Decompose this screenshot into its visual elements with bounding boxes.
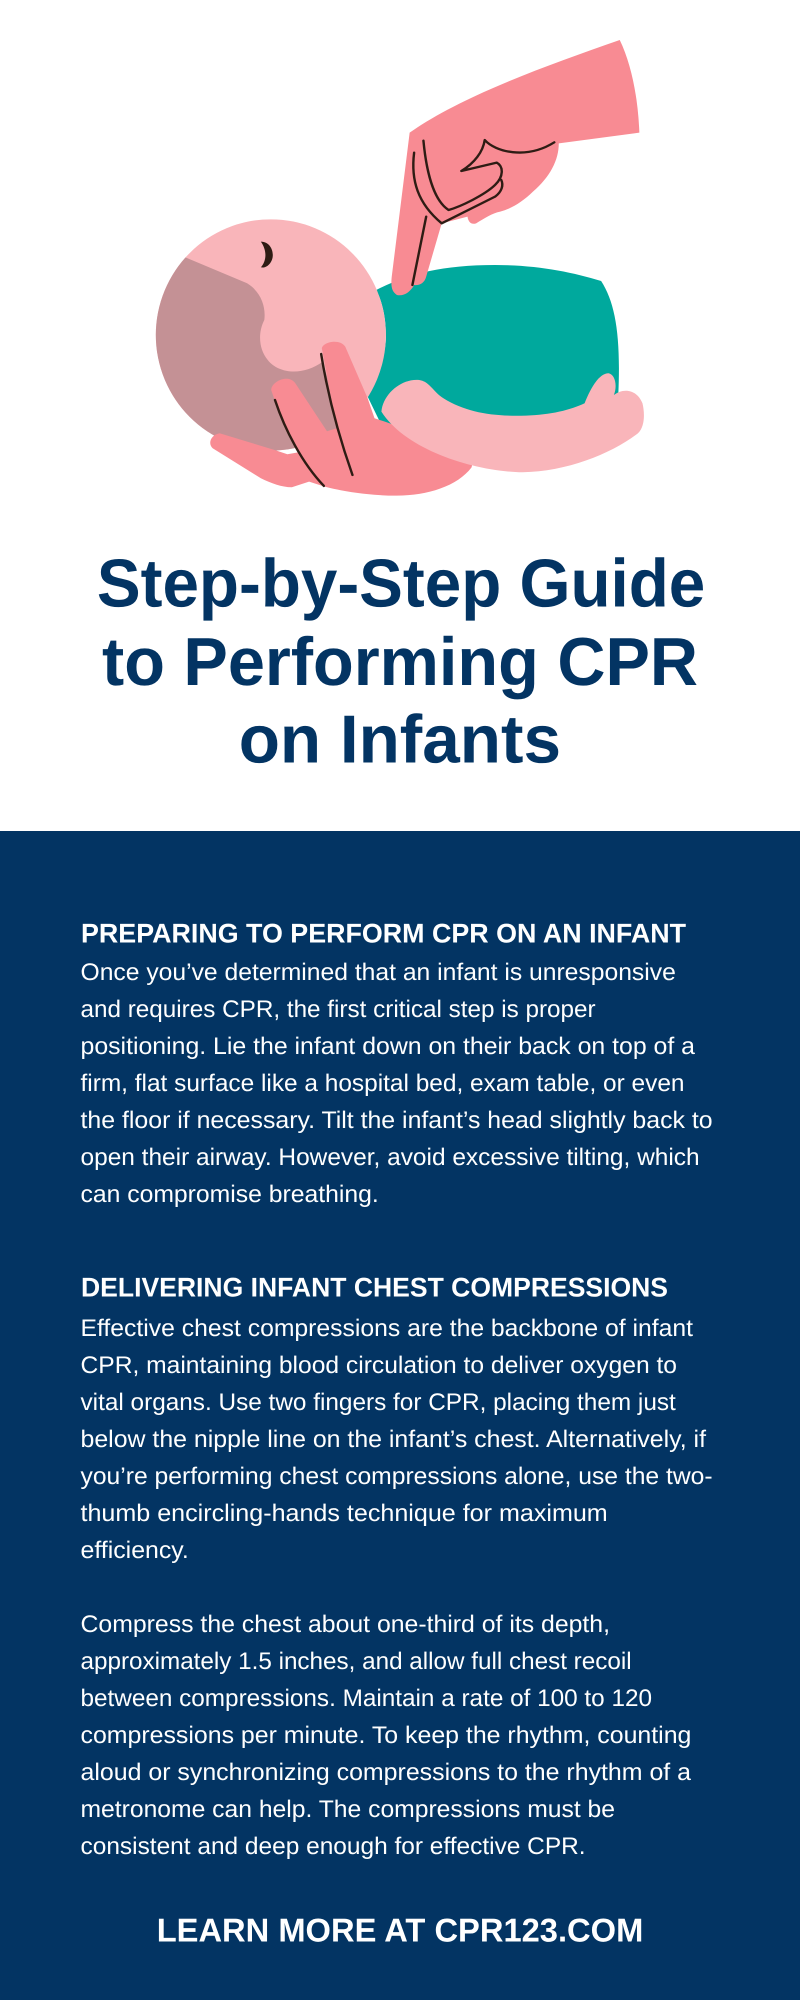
text block: compression depth and rate: approximately 1.5 inches, and allow full chest recoil: [80, 1648, 632, 1675]
pointing hand finger lines: [412, 140, 554, 285]
pointing adult hand: [391, 40, 639, 295]
supporting hand finger lines: [275, 354, 352, 486]
text block: compression depth and rate: between compressions. Maintain a rate of 100 to 120: [80, 1685, 652, 1712]
text block: preparing: open their airway. However, avoid excessive tilting, which: [80, 1144, 700, 1171]
text block: compression depth and rate: [80, 1611, 692, 1860]
text block: preparing: positioning. Lie the infant down on their back on top of a: [80, 1033, 696, 1060]
footer call to action: LEARN MORE AT CPR123.COM: [157, 1911, 643, 1948]
text block: delivering compressions: [80, 1315, 713, 1564]
text block: compression depth and rate: Compress the chest about one-third of its depth,: [80, 1611, 610, 1638]
illustration: infant receiving two-finger CPR: [144, 40, 644, 496]
text block: delivering compressions: Effective chest compressions are the backbone of infant: [80, 1315, 693, 1342]
infant arm: [381, 373, 644, 472]
text block: delivering compressions: below the nipple line on the infant’s chest. Alternatively, if: [80, 1426, 706, 1453]
title: on Infants: [239, 702, 561, 778]
text block: preparing: can compromise breathing.: [80, 1181, 379, 1208]
infant hair: [156, 258, 336, 450]
infant head: [156, 219, 386, 451]
text block: compression depth and rate: metronome can help. The compressions must be: [80, 1796, 615, 1823]
text block: preparing: and requires CPR, the first critical step is proper: [80, 996, 596, 1023]
text block: delivering compressions: efficiency.: [80, 1537, 189, 1564]
text block: delivering compressions: you’re performing chest compressions alone, use the two-: [80, 1463, 713, 1490]
text block: preparing: Once you’ve determined that an infant is unresponsive: [80, 959, 676, 986]
text block: delivering compressions: vital organs. Use two fingers for CPR, placing them just: [80, 1389, 676, 1416]
text block: preparing: [80, 959, 713, 1208]
heading: preparing to perform CPR: PREPARING TO PERFORM CPR ON AN INFANT: [81, 919, 687, 949]
title: [97, 546, 705, 778]
heading: delivering compressions: DELIVERING INFANT CHEST COMPRESSIONS: [81, 1273, 668, 1303]
text block: preparing: the floor if necessary. Tilt the infant’s head slightly back to: [80, 1107, 713, 1134]
text block: compression depth and rate: aloud or synchronizing compressions to the rhythm of a: [80, 1759, 692, 1786]
panel: article text: [0, 831, 800, 2000]
infant eye: [261, 242, 273, 268]
text block: compression depth and rate: compressions per minute. To keep the rhythm, counting: [80, 1722, 691, 1749]
title: to Performing CPR: [102, 624, 698, 700]
infant teal shirt: [368, 265, 619, 437]
text block: delivering compressions: thumb encircling-hands technique for maximum: [80, 1500, 608, 1527]
supporting hand: [210, 342, 474, 496]
text block: compression depth and rate: consistent and deep enough for effective CPR.: [80, 1833, 586, 1860]
text block: delivering compressions: CPR, maintaining blood circulation to deliver oxygen to: [80, 1352, 677, 1379]
text block: preparing: firm, flat surface like a hospital bed, exam table, or even: [80, 1070, 684, 1097]
title: Step-by-Step Guide: [97, 546, 705, 622]
